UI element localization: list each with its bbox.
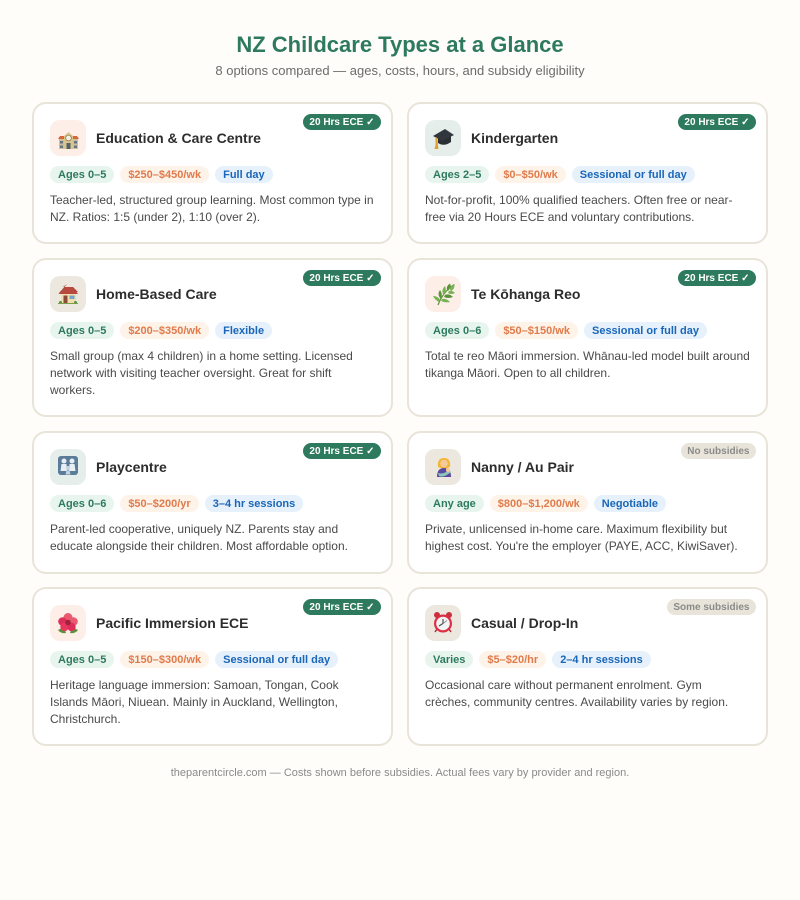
tags: Varies [433, 654, 465, 666]
tags: $5–$20/hr [487, 654, 538, 666]
badge: subsidy [303, 599, 381, 615]
tags: 3–4 hr sessions [213, 498, 295, 510]
description: Heritage language immersion: Samoan, Tongan, Cook Islands Māori, Niuean. Mainly in Auckland, Wellington, Christchurch. [50, 678, 339, 726]
tags: $200–$350/wk [128, 325, 201, 337]
badge: subsidy [681, 443, 756, 459]
description: Not-for-profit, 100% qualified teachers. Often free or near-free via 20 Hours ECE and voluntary contributions. [425, 193, 732, 224]
tags: Ages 0–5 [58, 654, 106, 666]
panel: Nanny / Au Pair [407, 431, 768, 574]
heading: Nanny / Au Pair [471, 459, 574, 475]
icon: house [50, 276, 86, 312]
description: Private, unlicensed in-home care. Maximum flexibility but highest cost. You're the employer (PAYE, ACC, KiwiSaver). [425, 522, 738, 553]
badge: subsidy: Some subsidies [673, 602, 750, 613]
description: Small group (max 4 children) in a home setting. Licensed network with visiting teacher oversight. Great for shift workers. [50, 349, 353, 397]
footer note: theparentcircle.com — Costs shown before subsidies. Actual fees vary by provider and region. [171, 767, 629, 779]
badge: subsidy: 20 Hrs ECE ✓ [309, 273, 374, 284]
tags [425, 495, 666, 512]
tags: Flexible [223, 325, 264, 337]
tags: Sessional or full day [223, 654, 330, 666]
panel: Education & Care Centre [32, 102, 393, 244]
badge: subsidy: 20 Hrs ECE ✓ [309, 117, 374, 128]
badge: subsidy: 20 Hrs ECE ✓ [309, 602, 374, 613]
panel: Pacific Immersion ECE [32, 587, 393, 746]
icon: herb [425, 276, 461, 312]
panel: Playcentre [32, 431, 393, 574]
tags: $800–$1,200/wk [498, 498, 580, 510]
tags: Ages 0–6 [433, 325, 481, 337]
badge: subsidy [303, 270, 381, 286]
badge: subsidy: 20 Hrs ECE ✓ [684, 117, 750, 128]
icon: woman feeding baby [425, 449, 461, 485]
panel: Kindergarten [407, 102, 768, 244]
badge: subsidy: 20 Hrs ECE ✓ [309, 446, 374, 457]
badge: subsidy [678, 114, 756, 130]
tags: Any age [433, 498, 476, 510]
description: Total te reo Māori immersion. Whānau-led model built around tikanga Māori. Open to all children. [425, 349, 750, 380]
icon: alarm clock [425, 605, 461, 641]
icon: hibiscus [50, 605, 86, 641]
tags: $150–$300/wk [128, 654, 201, 666]
heading: Kindergarten [471, 130, 558, 146]
tags: $0–$50/wk [503, 169, 558, 181]
badge: subsidy: 20 Hrs ECE ✓ [684, 273, 750, 284]
description: Occasional care without permanent enrolment. Gym crèches, community centres. Availability varies by region. [425, 678, 728, 709]
tags: Ages 0–5 [58, 325, 106, 337]
tags: $250–$450/wk [128, 169, 201, 181]
tags: Ages 0–6 [58, 498, 106, 510]
tags [50, 322, 272, 339]
tags: Ages 2–5 [433, 169, 481, 181]
panel: Te Kōhanga Reo [407, 258, 768, 417]
heading: Te Kōhanga Reo [471, 286, 580, 302]
subtitle: 8 options compared — ages, costs, hours, and subsidy eligibility [215, 63, 585, 78]
icon: people [50, 449, 86, 485]
tags: $50–$200/yr [128, 498, 191, 510]
tags: Sessional or full day [592, 325, 699, 337]
tags [50, 651, 338, 668]
tags [50, 166, 273, 183]
heading: Playcentre [96, 459, 167, 475]
title: NZ Childcare Types at a Glance [236, 32, 564, 57]
tags: Full day [223, 169, 265, 181]
tags [425, 651, 651, 668]
tags [425, 322, 707, 339]
description: Parent-led cooperative, uniquely NZ. Parents stay and educate alongside their children. Most affordable option. [50, 522, 348, 553]
tags: Sessional or full day [580, 169, 687, 181]
tags: Ages 0–5 [58, 169, 106, 181]
icon: school building [50, 120, 86, 156]
tags: 2–4 hr sessions [560, 654, 643, 666]
heading: Home-Based Care [96, 286, 217, 302]
tags: Negotiable [602, 498, 658, 510]
heading: Casual / Drop-In [471, 615, 578, 631]
tags [425, 166, 695, 183]
badge: subsidy [303, 114, 381, 130]
tags: $50–$150/wk [503, 325, 570, 337]
badge: subsidy [667, 599, 756, 615]
badge: subsidy: No subsidies [687, 446, 750, 457]
tags [50, 495, 303, 512]
badge: subsidy [303, 443, 381, 459]
icon: graduation cap [425, 120, 461, 156]
panel: Home-Based Care [32, 258, 393, 417]
heading: Education & Care Centre [96, 130, 261, 146]
badge: subsidy [678, 270, 756, 286]
heading: Pacific Immersion ECE [96, 615, 249, 631]
description: Teacher-led, structured group learning. Most common type in NZ. Ratios: 1:5 (under 2), 1:10 (over 2). [50, 193, 374, 224]
panel: Casual / Drop-In [407, 587, 768, 746]
